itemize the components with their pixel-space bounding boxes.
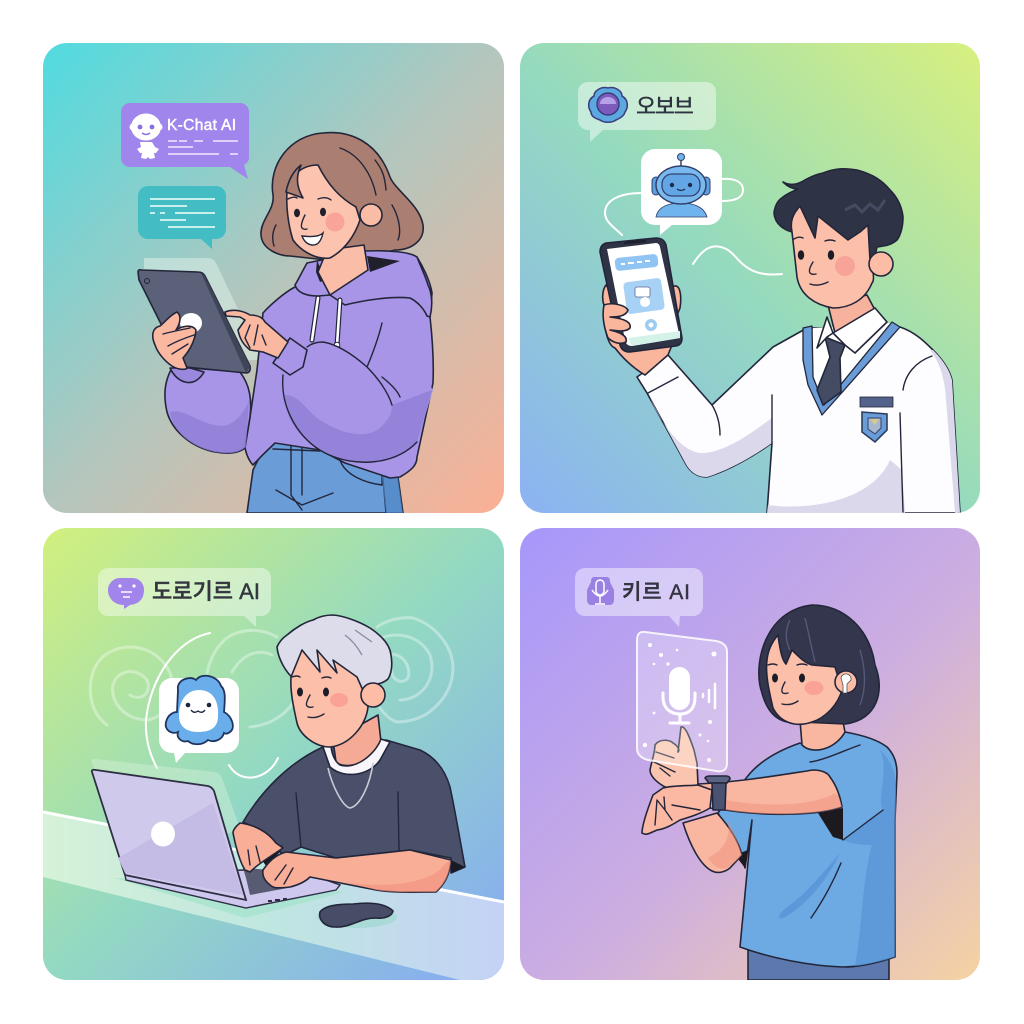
도로기르 AI label bubble: [98, 568, 271, 627]
face: [767, 635, 842, 724]
shirt collar: [817, 308, 887, 353]
키르 AI label bubble: 키르 AI: [622, 581, 690, 604]
fold lines on torso: [367, 323, 400, 397]
tie: [817, 337, 845, 405]
white shirt V: [813, 323, 890, 329]
panel: 오보브 student with smartphone: [520, 43, 980, 513]
shirt sleeve dark edge: [262, 845, 465, 873]
arm shading: [345, 860, 451, 892]
laptop surface shadow: [115, 878, 345, 918]
blue t-shirt: [718, 732, 897, 967]
smartwatch: [705, 776, 730, 810]
face details: [288, 197, 344, 245]
sweater shading: [650, 350, 960, 513]
fingers: [248, 846, 293, 884]
panel: 도로기르 AI user with laptop: [43, 528, 504, 980]
ear with earbud: [835, 671, 857, 693]
K-Chat AI speech bubble: K-Chat AI: [167, 117, 236, 134]
hair back: [759, 605, 879, 724]
right hand finger lines: [245, 325, 266, 348]
necklace: [328, 763, 373, 808]
hoodie torso: [245, 253, 433, 478]
silver hair: [277, 615, 392, 700]
left sleeve shadow: [170, 400, 249, 453]
white collar: [323, 739, 390, 774]
hair highlight: [845, 200, 885, 212]
smartphone: [600, 238, 682, 352]
lower arm shading: [708, 820, 742, 869]
glass voice card: [637, 632, 727, 771]
face details: [768, 664, 824, 705]
ear: [869, 252, 893, 276]
hair highlights: [345, 630, 372, 655]
pointing hand: [650, 727, 698, 788]
pants: [748, 945, 889, 980]
robot chat card: [641, 149, 722, 235]
shirt shading: [843, 750, 896, 966]
오보브 label bubble: [578, 82, 716, 142]
키르 AI label bubble: [575, 568, 703, 627]
left hand finger lines: [163, 328, 194, 354]
fist: [642, 785, 712, 834]
hood inner dark: [316, 256, 400, 282]
mascot chat card: [159, 676, 239, 763]
right sleeve outline: [283, 342, 417, 462]
desk edge: [43, 812, 504, 902]
shirt lines: [810, 745, 883, 918]
hair: [774, 169, 903, 270]
face details: [794, 237, 855, 285]
right hand pointing: [225, 310, 288, 358]
blue V stripe: [803, 322, 900, 415]
fingers on phone: [603, 304, 630, 343]
neck: [800, 720, 845, 750]
teal message bubble: [138, 186, 226, 249]
sleeve opening: [818, 808, 843, 840]
left sleeve dark tip: [735, 850, 748, 868]
tablet: [138, 270, 250, 373]
hand finger lines: [654, 752, 675, 776]
hand back: [603, 285, 672, 375]
도로기르 AI label bubble: 도로기르 AI: [152, 579, 260, 604]
left hand on tablet: [153, 312, 196, 369]
face: [291, 650, 368, 747]
lower arm: [683, 813, 742, 872]
face: [287, 165, 360, 258]
horizontal forearm: [698, 770, 842, 814]
face: [791, 206, 873, 308]
left cuff: [170, 368, 204, 383]
fist finger lines: [655, 797, 700, 825]
neck: [318, 245, 368, 295]
jeans: [247, 440, 403, 513]
mouse: [317, 903, 397, 928]
dark t-shirt: [243, 740, 465, 873]
neck: [333, 715, 381, 766]
right sleeve shadow: [285, 390, 432, 462]
left hair strand: [286, 165, 303, 198]
shirt folds: [296, 792, 399, 850]
panel: 키르 AI user with smartwatch: [520, 528, 980, 980]
ear: [361, 683, 385, 707]
hair back: [261, 133, 423, 262]
face details: [292, 676, 348, 718]
hair strands: [786, 618, 864, 705]
forearm shading: [725, 794, 842, 814]
desk: [43, 812, 504, 980]
K-Chat AI speech bubble: [121, 103, 249, 179]
name tag: [860, 397, 893, 407]
hoodie left sleeve: [165, 368, 251, 453]
phone thumb side: [670, 286, 681, 318]
hair strands: [273, 148, 400, 246]
right arm and hand: [263, 850, 451, 892]
ear: [360, 204, 382, 226]
tablet glow: [144, 258, 262, 360]
laptop glow: [91, 759, 240, 870]
background swirls: [90, 618, 453, 727]
right sleeve: [320, 346, 433, 456]
left forearm and hand: [233, 823, 283, 872]
decorative connection lines: [605, 179, 782, 275]
decorative curves: [146, 633, 278, 778]
panel: K-Chat AI user with tablet: [43, 43, 504, 513]
neck: [828, 295, 875, 333]
badge: [862, 412, 887, 442]
right cuff: [273, 338, 307, 375]
오보브 label bubble: 오보브: [636, 94, 694, 119]
hood: [295, 251, 432, 317]
white sweater body: [637, 322, 960, 513]
laptop: [92, 770, 340, 908]
drawstrings: [312, 298, 340, 348]
shirt fold: [779, 853, 840, 918]
